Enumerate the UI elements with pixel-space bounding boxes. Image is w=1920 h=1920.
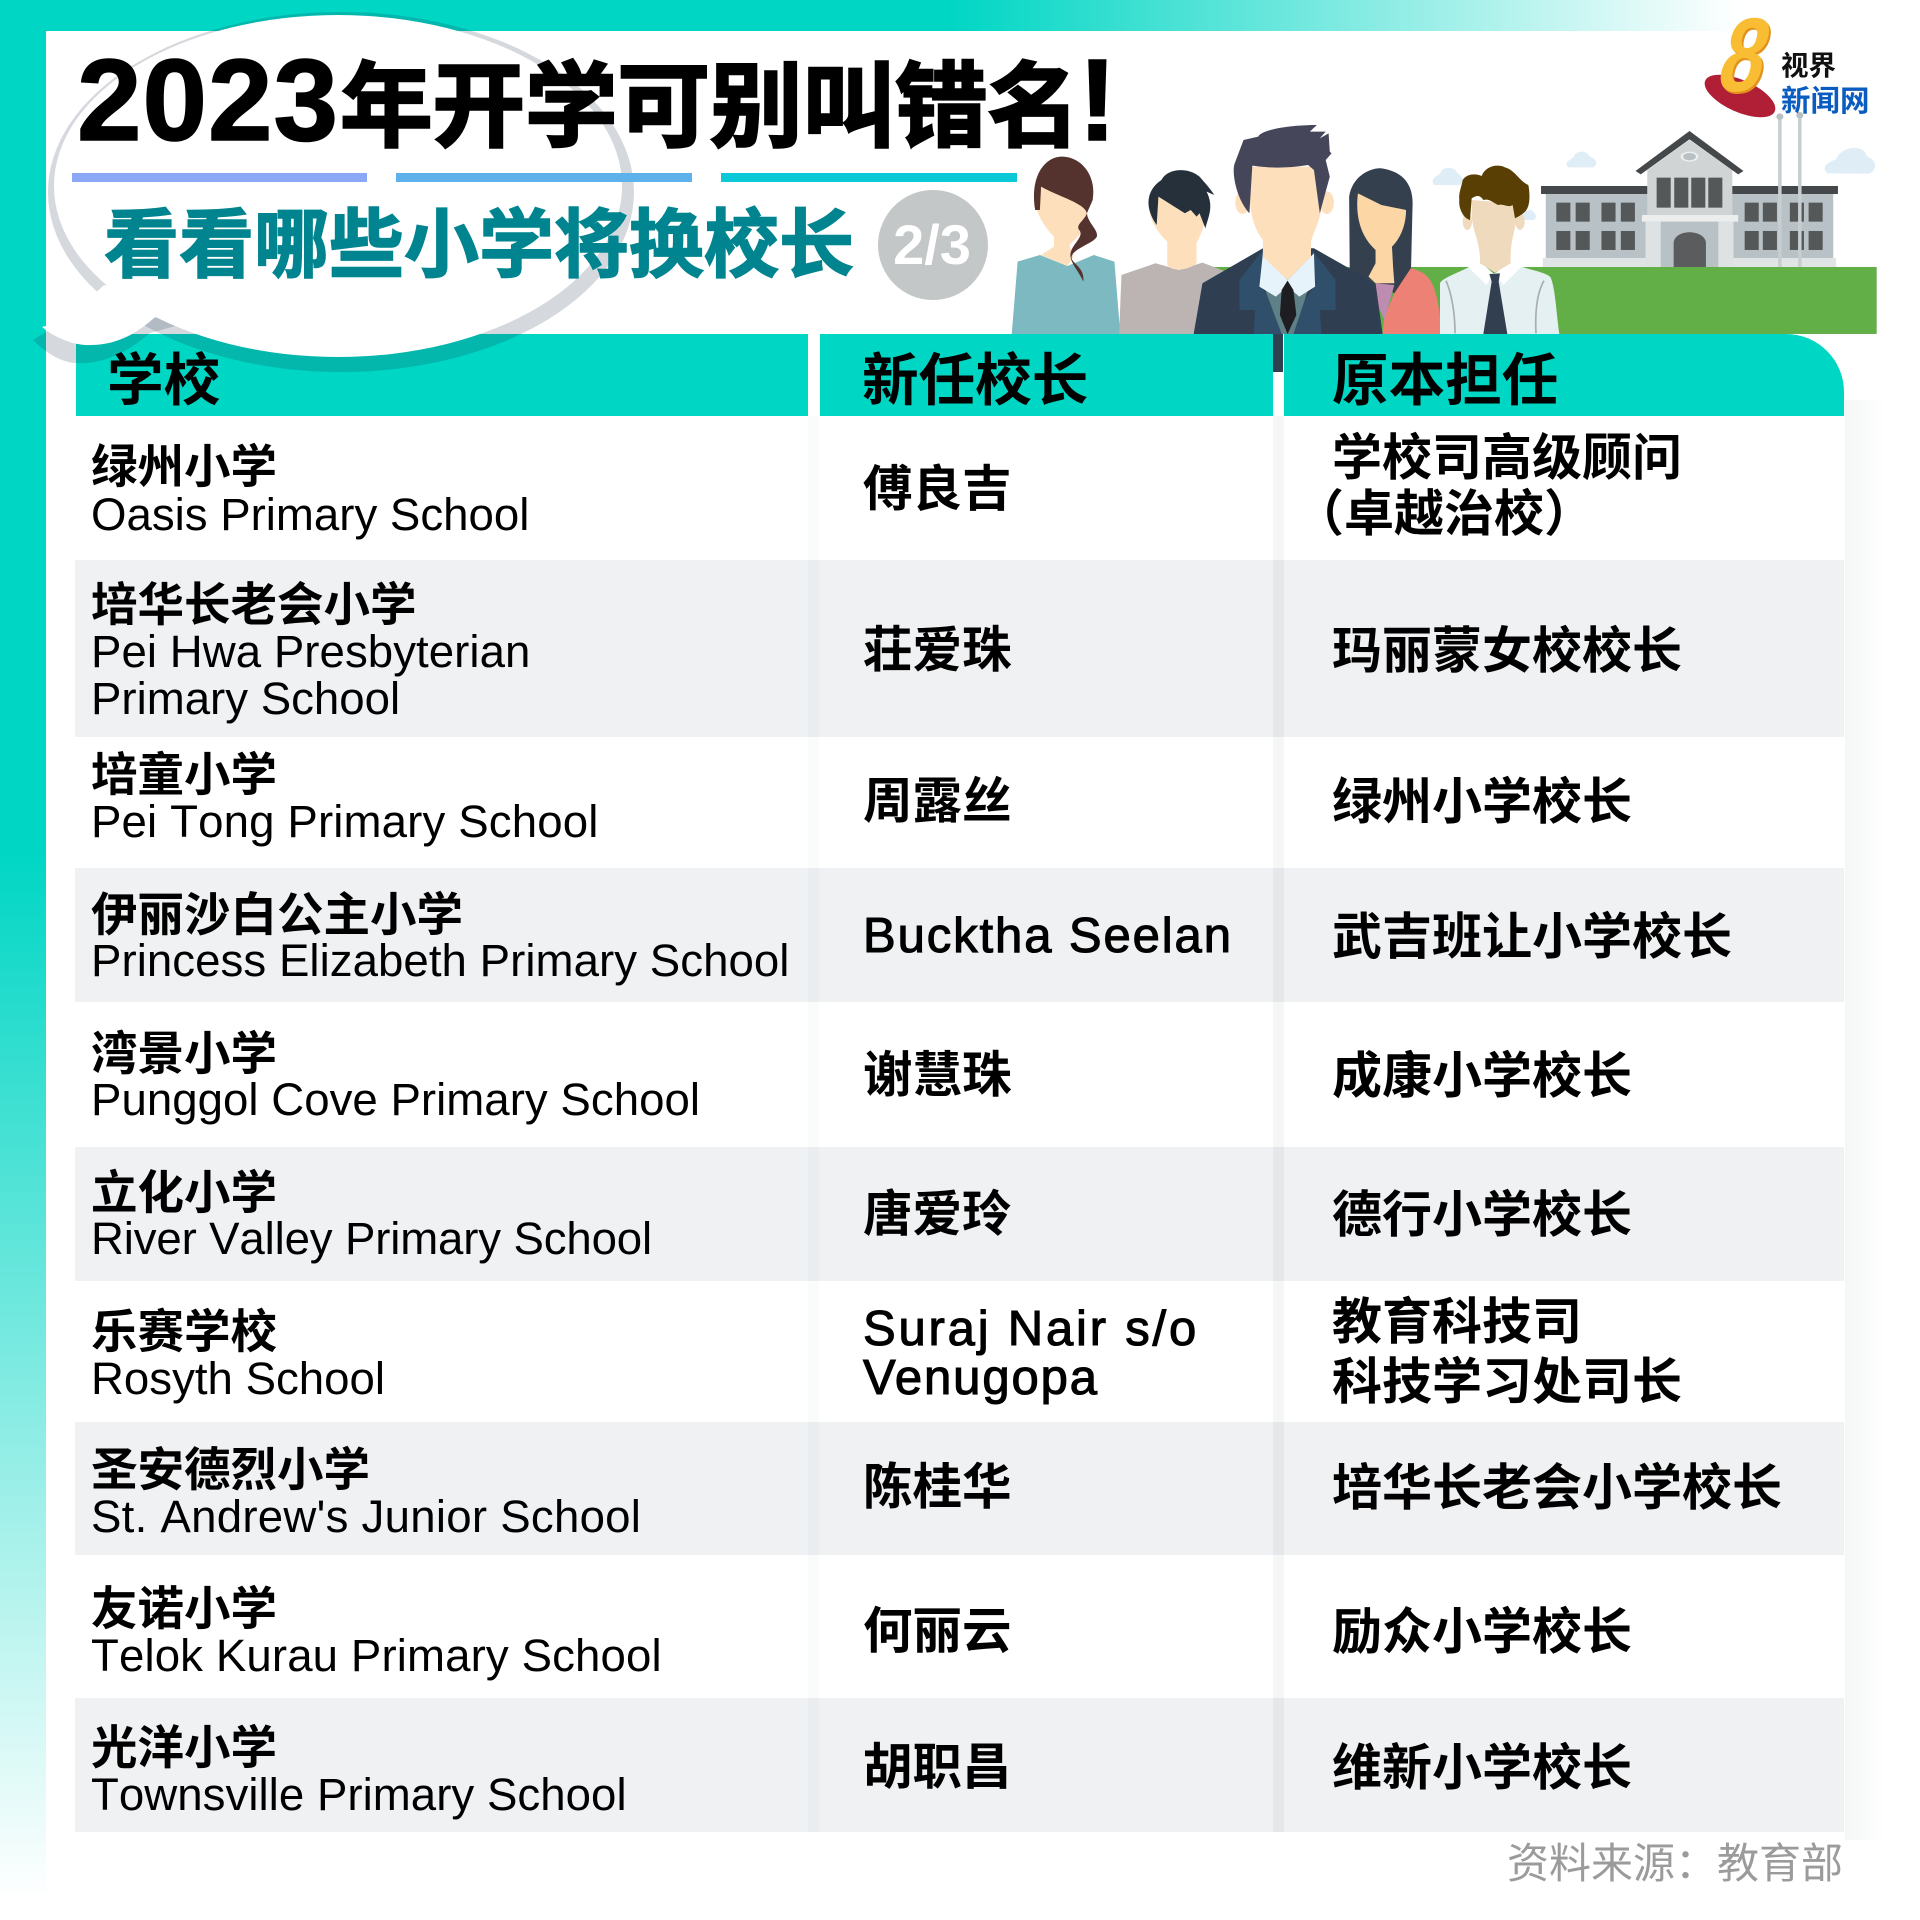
row: St. Andrew's Junior School: St. Andrew's Junior School: [91, 1491, 641, 1542]
header cell: new principal: 新任校长: [862, 349, 1088, 412]
title divider bars: [72, 173, 1017, 182]
row: Townsville Primary School: 胡职昌: [863, 1740, 1012, 1795]
row: Telok Kurau Primary School: [75, 1555, 1844, 1698]
grass field: [1211, 267, 1877, 334]
table body rows: [75, 430, 1844, 1832]
row: Townsville Primary School: 维新小学校长: [1332, 1740, 1632, 1796]
header cell: previous post: 原本担任: [1332, 349, 1558, 412]
row: Rosyth School: Rosyth School: [91, 1353, 385, 1404]
row: Telok Kurau Primary School: 友诺小学: [91, 1583, 277, 1635]
school building: [1541, 112, 1838, 267]
row: St. Andrew's Junior School: 培华长老会小学校长: [1332, 1460, 1782, 1516]
row: Pei Hwa Presbyterian Primary School: Primary School: [91, 673, 400, 724]
logo numeral 8: 8: [1708, 0, 1782, 114]
row: Princess Elizabeth Primary School: [75, 868, 1844, 1002]
row: Oasis Primary School: 绿州小学: [91, 441, 277, 493]
source note: 资料来源：教育部: [1507, 1840, 1843, 1887]
person: principal in suit: [1194, 125, 1383, 334]
person: man with curly hair: [1440, 166, 1559, 334]
logo red disc: [1704, 74, 1776, 118]
row: River Valley Primary School: 德行小学校长: [1332, 1187, 1632, 1243]
row: River Valley Primary School: 唐爱玲: [863, 1187, 1012, 1242]
header cell: school: [76, 334, 808, 416]
row: Pei Hwa Presbyterian Primary School: 荘爱珠: [863, 623, 1012, 678]
row: Pei Tong Primary School: Pei Tong Primary School: [91, 796, 598, 847]
clouds: [1433, 148, 1875, 220]
header cell: new principal: [820, 334, 1273, 416]
row: Pei Tong Primary School: 绿州小学校长: [1332, 774, 1632, 830]
row: St. Andrew's Junior School: 陈桂华: [863, 1460, 1012, 1515]
header cell: previous post: [1284, 334, 1844, 416]
row: Pei Hwa Presbyterian Primary School: 玛丽蒙女校校长: [1332, 623, 1682, 679]
row: Townsville Primary School: 光洋小学: [91, 1722, 277, 1774]
row: Punggol Cove Primary School: [75, 1002, 1844, 1147]
top gradient band: [0, 0, 1920, 31]
table header row: [76, 334, 1844, 416]
speech bubble behind title: [33, 12, 634, 372]
row: Princess Elizabeth Primary School: 伊丽沙白公主小学: [91, 889, 463, 941]
row: Pei Tong Primary School: 培童小学: [91, 749, 277, 801]
row: Telok Kurau Primary School: Telok Kurau Primary School: [91, 1630, 662, 1681]
person: short hair: [1119, 170, 1226, 334]
logo text: 视界: 视界: [1781, 50, 1836, 81]
row: St. Andrew's Junior School: [75, 1422, 1844, 1555]
row: River Valley Primary School: River Valley Primary School: [91, 1213, 652, 1264]
subtitle: 看看哪些小学将换校长: [104, 203, 854, 287]
row: Oasis Primary School: Oasis Primary School: [91, 489, 529, 540]
row: Townsville Primary School: [75, 1698, 1844, 1832]
row: St. Andrew's Junior School: 圣安德烈小学: [91, 1444, 370, 1496]
row: Telok Kurau Primary School: 何丽云: [863, 1604, 1012, 1659]
row: Pei Hwa Presbyterian Primary School: 培华长老会小学: [91, 579, 416, 631]
row: Pei Hwa Presbyterian Primary School: Pei Hwa Presbyterian: [91, 626, 530, 677]
row: Rosyth School: 乐赛学校: [91, 1306, 277, 1358]
row: Princess Elizabeth Primary School: 武吉班让小学校长: [1332, 909, 1732, 965]
row: Princess Elizabeth Primary School: Bucktha Seelan: [863, 909, 1233, 963]
page badge 2/3: [878, 190, 988, 300]
logo text: 新闻网: 新闻网: [1781, 85, 1870, 118]
row: Pei Tong Primary School: 周露丝: [863, 774, 1012, 829]
row: River Valley Primary School: [75, 1147, 1844, 1281]
row: Rosyth School: Suraj Nair s/o: [863, 1302, 1199, 1356]
row: Oasis Primary School: 傅良吉: [863, 462, 1012, 517]
row: Oasis Primary School: （卓越治校）: [1294, 486, 1594, 542]
row: Telok Kurau Primary School: 励众小学校长: [1332, 1604, 1632, 1660]
row: Oasis Primary School: [75, 416, 1844, 560]
table: principals list: [75, 334, 1844, 1832]
row: Rosyth School: [75, 1281, 1844, 1422]
row: Oasis Primary School: 学校司高级顾问: [1332, 430, 1682, 486]
page badge 2/3: 2/3: [893, 213, 971, 276]
row: Punggol Cove Primary School: 成康小学校长: [1332, 1048, 1632, 1104]
row: Pei Hwa Presbyterian Primary School: [75, 560, 1844, 737]
jacket strip between header columns: [1273, 334, 1283, 372]
logo: 8world news: [1704, 0, 1870, 118]
title: 2023年开学可别叫错名!: [77, 32, 1117, 166]
right edge soft shadow: [1845, 400, 1885, 1840]
header cell: school: 学校: [107, 349, 220, 412]
row: Pei Tong Primary School: [75, 737, 1844, 868]
person: woman with ponytail: [1012, 157, 1120, 334]
row: River Valley Primary School: 立化小学: [91, 1167, 277, 1219]
row: Princess Elizabeth Primary School: Princess Elizabeth Primary School: [91, 935, 790, 986]
row: Rosyth School: 教育科技司: [1332, 1294, 1582, 1350]
row: Rosyth School: 科技学习处司长: [1332, 1354, 1682, 1410]
row: Punggol Cove Primary School: 谢慧珠: [863, 1048, 1012, 1103]
row: Townsville Primary School: Townsville Primary School: [91, 1769, 627, 1820]
illustration: people and school: [1012, 112, 1877, 334]
person: woman in coral jacket: [1349, 168, 1442, 334]
row: Rosyth School: Venugopa: [863, 1351, 1099, 1405]
row: Punggol Cove Primary School: 湾景小学: [91, 1028, 277, 1080]
left gradient band: [0, 0, 46, 1920]
row: Punggol Cove Primary School: Punggol Cove Primary School: [91, 1074, 700, 1125]
